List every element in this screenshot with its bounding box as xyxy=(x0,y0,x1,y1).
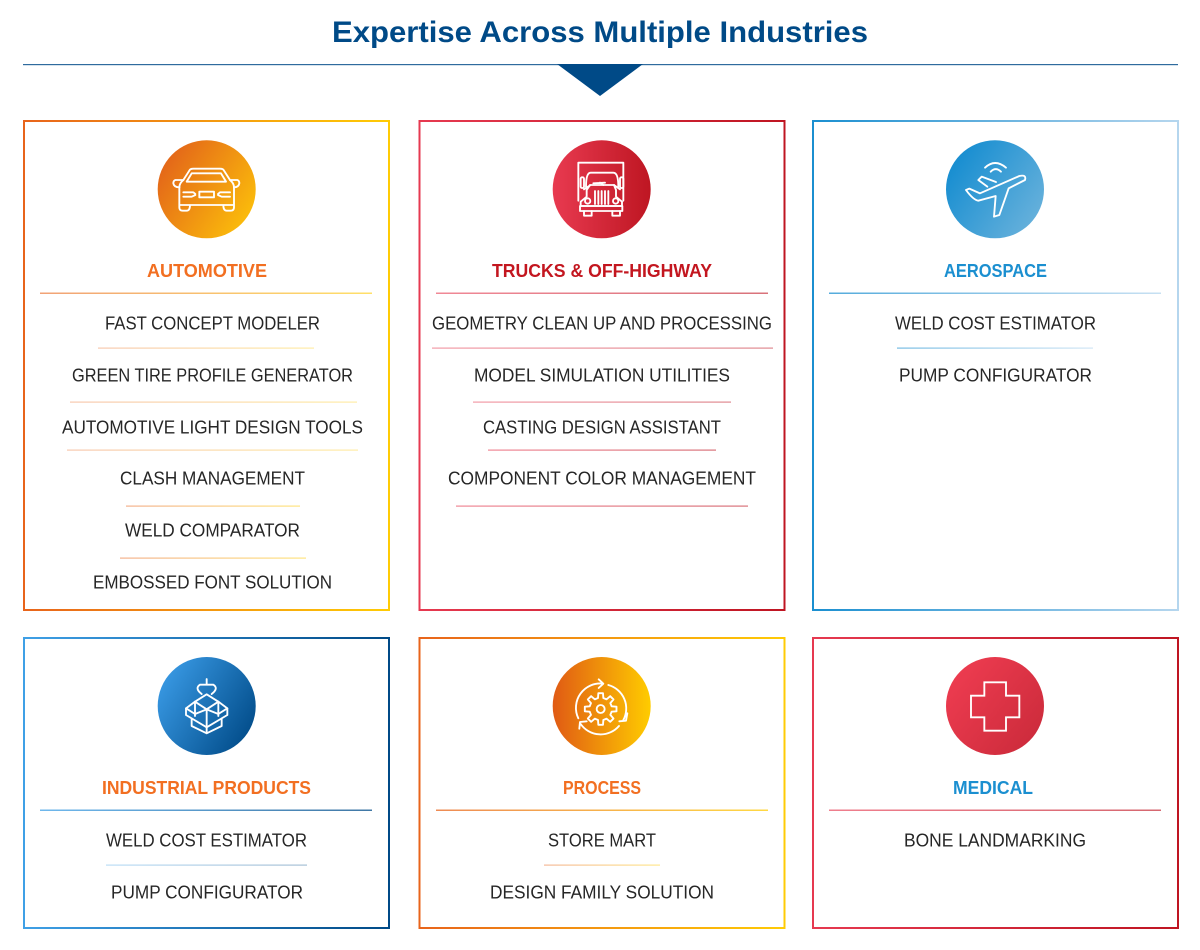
list item: CLASH MANAGEMENT xyxy=(120,468,305,488)
heading divider xyxy=(40,292,372,294)
icon: medical cross xyxy=(946,657,1044,755)
list item: GEOMETRY CLEAN UP AND PROCESSING xyxy=(432,312,772,334)
list item: PUMP CONFIGURATOR xyxy=(899,364,1092,386)
list item: GREEN TIRE PROFILE GENERATOR xyxy=(72,364,353,386)
list item: AUTOMOTIVE LIGHT DESIGN TOOLS xyxy=(62,416,363,438)
list item: COMPONENT COLOR MANAGEMENT xyxy=(448,468,756,488)
icon: car xyxy=(158,140,256,238)
list item: EMBOSSED FONT SOLUTION xyxy=(93,572,332,592)
heading divider xyxy=(829,810,1161,811)
header rule with pointer arrow xyxy=(23,64,1178,96)
heading: process: PROCESS xyxy=(563,777,641,798)
list item: WELD COMPARATOR xyxy=(125,520,300,540)
list item: MODEL SIMULATION UTILITIES xyxy=(474,364,730,386)
heading divider xyxy=(829,292,1161,294)
panel: aerospace xyxy=(813,121,1178,610)
heading divider xyxy=(436,810,768,811)
heading divider xyxy=(40,810,372,811)
list item: WELD COST ESTIMATOR xyxy=(895,312,1096,334)
list item: BONE LANDMARKING xyxy=(904,830,1086,850)
panel: medical xyxy=(813,638,1178,928)
list item: FAST CONCEPT MODELER xyxy=(105,312,320,334)
heading: aerospace: AEROSPACE xyxy=(944,260,1047,281)
panel: automotive xyxy=(24,121,389,610)
list item: PUMP CONFIGURATOR xyxy=(111,882,303,902)
icon: robot arm with box xyxy=(158,657,256,755)
heading: automotive: AUTOMOTIVE xyxy=(147,260,267,281)
list item: STORE MART xyxy=(548,830,656,850)
heading: industrial products: INDUSTRIAL PRODUCTS xyxy=(102,777,311,798)
heading: trucks: TRUCKS & OFF-HIGHWAY xyxy=(492,260,713,281)
panel: industrial products xyxy=(24,638,389,928)
icon: truck xyxy=(553,140,651,238)
icon: airplane xyxy=(946,140,1044,238)
panel: process xyxy=(420,638,784,928)
icon: gear with cycle arrows xyxy=(553,657,651,755)
title: Expertise Across Multiple Industries xyxy=(332,16,868,49)
list item: WELD COST ESTIMATOR xyxy=(106,830,307,850)
panel: trucks and off-highway xyxy=(420,121,784,610)
heading divider xyxy=(436,292,768,294)
heading: medical: MEDICAL xyxy=(953,777,1033,798)
list item: DESIGN FAMILY SOLUTION xyxy=(490,882,714,902)
list item: CASTING DESIGN ASSISTANT xyxy=(483,416,721,438)
